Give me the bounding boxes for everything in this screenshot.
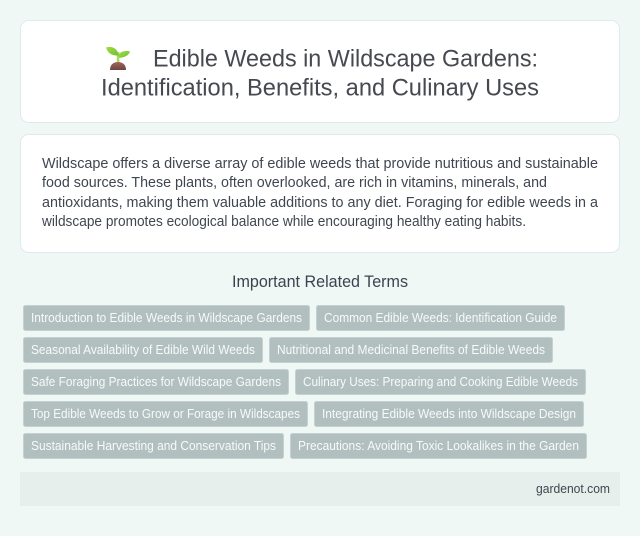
tag list [24,306,586,458]
panel: title card [20,20,620,122]
tag [24,306,310,330]
tag [24,434,284,458]
tag: Sustainable Harvesting and Conservation Tips [31,438,276,453]
panel: intro paragraph: food sources. These plants, often overlooked, are rich in vitamins, minerals, and [42,175,547,191]
tag: Integrating Edible Weeds into Wildscape Design [322,406,576,421]
tag: Culinary Uses: Preparing and Cooking Edible Weeds [303,374,578,389]
icon: sprout [106,47,130,70]
tag [296,370,586,394]
footer source: gardenot.com [536,481,610,496]
tag [24,402,308,426]
heading: related terms: Important Related Terms [232,273,408,291]
tag [24,370,288,394]
title heading: Identification, Benefits, and Culinary Uses [101,74,539,102]
panel: intro paragraph [20,134,620,252]
tag: Introduction to Edible Weeds in Wildscape Gardens [31,310,302,325]
panel: intro paragraph: Wildscape offers a diverse array of edible weeds that provide nutritious and sustainable [42,156,598,172]
title heading [101,46,539,102]
panel: intro paragraph: antioxidants, making them valuable additions to any diet. Foraging for edible weeds in a [42,195,599,211]
panel: intro paragraph: wildscape promotes ecological balance while encouraging healthy eating habits. [41,214,526,230]
tag: Seasonal Availability of Edible Wild Weeds [31,342,255,357]
tag: Safe Foraging Practices for Wildscape Gardens [31,374,281,389]
tag: Precautions: Avoiding Toxic Lookalikes in the Garden [298,438,579,453]
tag: Nutritional and Medicinal Benefits of Edible Weeds [277,342,545,357]
tag [290,434,586,458]
tag [24,338,262,362]
tag: Common Edible Weeds: Identification Guide [324,310,557,325]
footer bar [20,472,620,506]
tag [316,306,564,330]
tag [314,402,584,426]
tag: Top Edible Weeds to Grow or Forage in Wildscapes [31,406,300,421]
title heading: Edible Weeds in Wildscape Gardens: [153,46,538,72]
tag [270,338,552,362]
